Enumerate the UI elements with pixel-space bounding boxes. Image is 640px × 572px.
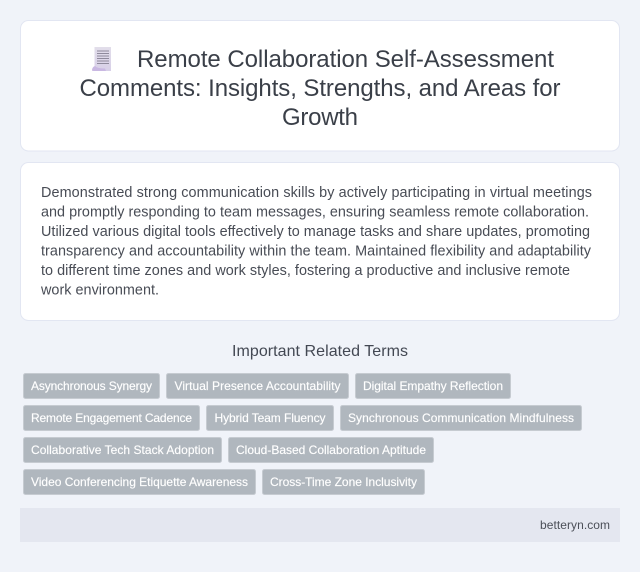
body text: Demonstrated strong communication skills by actively participating in virtual meetings (41, 185, 592, 201)
tag: Video Conferencing Etiquette Awareness (31, 475, 248, 489)
heading: important related terms: Important Related Terms (232, 343, 408, 360)
title: Growth (282, 104, 358, 131)
tag (228, 438, 434, 462)
icon: scroll document (92, 47, 111, 71)
footer bar (20, 508, 620, 542)
body text: transparency and accountability within the team. Maintained flexibility and adaptability (41, 244, 592, 260)
tag: Asynchronous Synergy (31, 379, 152, 393)
body text: to different time zones and work styles, fostering a productive and inclusive remote (41, 263, 570, 279)
panel: title card (20, 20, 620, 151)
body text: and promptly responding to team messages, ensuring seamless remote collaboration. (41, 204, 589, 220)
tag (24, 438, 222, 462)
body text: Utilized various digital tools effectively to manage tasks and share updates, promoting (41, 224, 590, 240)
footer bar: betteryn.com (540, 518, 610, 532)
tag: Hybrid Team Fluency (214, 411, 326, 425)
tag (24, 470, 256, 494)
tag (24, 406, 200, 430)
tag: Digital Empathy Reflection (363, 379, 503, 393)
tag: Collaborative Tech Stack Adoption (31, 443, 214, 457)
tag: Virtual Presence Accountability (174, 379, 340, 393)
tag group: related terms (24, 374, 582, 494)
tag: Synchronous Communication Mindfulness (348, 411, 574, 425)
tag (166, 374, 348, 398)
body text: work environment. (40, 282, 159, 298)
tag (356, 374, 510, 398)
panel: self-assessment comment (20, 162, 620, 320)
tag (24, 374, 160, 398)
tag: Cloud-Based Collaboration Aptitude (236, 443, 426, 457)
tag: Remote Engagement Cadence (31, 411, 192, 425)
title: Comments: Insights, Strengths, and Areas for (80, 75, 560, 102)
tag (340, 406, 582, 430)
tag (206, 406, 334, 430)
body text (40, 185, 592, 298)
tag (262, 470, 424, 494)
tag: Cross-Time Zone Inclusivity (270, 475, 417, 489)
title: Remote Collaboration Self-Assessment (137, 46, 554, 73)
title (80, 46, 560, 131)
